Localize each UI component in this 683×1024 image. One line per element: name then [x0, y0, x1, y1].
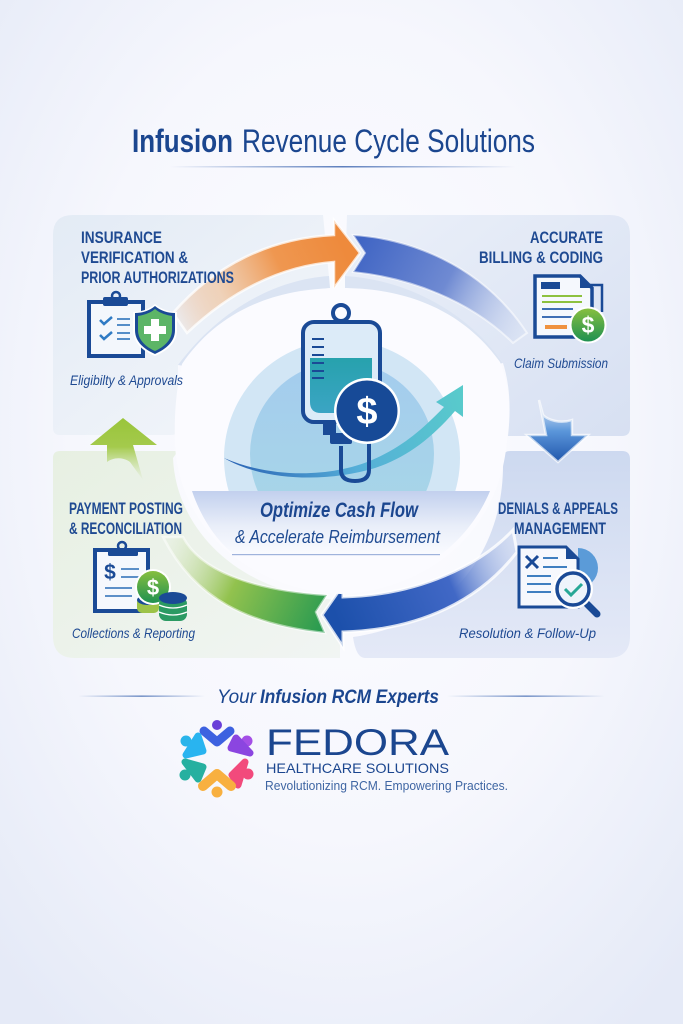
logo wordmark [265, 722, 508, 793]
panel: billing and coding background [345, 215, 630, 436]
panel text: payment posting: Collections & Reporting [72, 625, 195, 641]
panel text: insurance: Eligibilty & Approvals [70, 372, 183, 388]
banner [192, 491, 490, 555]
panel text: insurance: VERIFICATION & [81, 248, 188, 267]
banner: & Accelerate Reimbursement [235, 527, 441, 547]
growth swoosh arrow [224, 385, 463, 477]
panel text: payment posting: PAYMENT POSTING [69, 500, 183, 518]
center circle outer [224, 347, 460, 491]
panel text: billing [479, 228, 608, 371]
title: Infusion [132, 123, 233, 159]
panel: payment posting background [53, 451, 340, 658]
center white circle [175, 288, 509, 594]
logo wordmark: Revolutionizing RCM. Empowering Practices. [265, 779, 508, 793]
icon: document with magnifier [519, 547, 598, 614]
panel text: insurance [70, 228, 234, 388]
panel text: insurance: INSURANCE [81, 228, 162, 247]
panel text: payment posting: & RECONCILIATION [69, 520, 182, 538]
ring band [178, 276, 503, 366]
panel text: denials [459, 500, 618, 641]
panel text: billing: ACCURATE [530, 228, 603, 247]
icon: clipboard with coins [95, 542, 187, 621]
arrow: orange [173, 220, 360, 333]
icon: invoice document with dollar badge [535, 276, 606, 344]
panel text: payment posting [69, 500, 195, 641]
logo wordmark: HEALTHCARE SOLUTIONS [266, 760, 449, 776]
tagline: Your [217, 687, 257, 708]
panel text: insurance: PRIOR AUTHORIZATIONS [81, 268, 234, 287]
arrow: green bottom [163, 537, 327, 633]
panel text: billing: Claim Submission [514, 355, 608, 371]
panel: denials and appeals background [353, 451, 630, 658]
title: Revenue Cycle Solutions [242, 123, 535, 159]
logo wordmark: FEDORA [266, 722, 449, 763]
center circle inner [250, 371, 434, 491]
icon: IV bag with dollar badge: $ [356, 391, 378, 433]
title [132, 123, 535, 159]
arrow: down [527, 400, 588, 462]
icon: clipboard with shield [89, 292, 177, 356]
icon: clipboard with coins: $ [147, 575, 159, 600]
banner: Optimize Cash Flow [260, 499, 419, 522]
icon: IV bag with dollar badge [303, 305, 400, 481]
panel text: billing: BILLING & CODING [479, 248, 603, 267]
panel text: denials: DENIALS & APPEALS [498, 500, 618, 518]
arrow: blue top right [353, 235, 527, 343]
tagline: Infusion RCM Experts [260, 687, 439, 708]
panel text: denials: Resolution & Follow-Up [459, 625, 596, 641]
arrow: green up [90, 418, 157, 480]
icon: invoice document with dollar badge: $ [582, 312, 595, 338]
logo mark: six people [180, 720, 254, 798]
arrow: dark blue bottom [322, 530, 517, 647]
panel: insurance verification background [53, 215, 329, 435]
icon: clipboard with coins: $ [104, 561, 116, 584]
panel text: denials: MANAGEMENT [514, 520, 606, 538]
